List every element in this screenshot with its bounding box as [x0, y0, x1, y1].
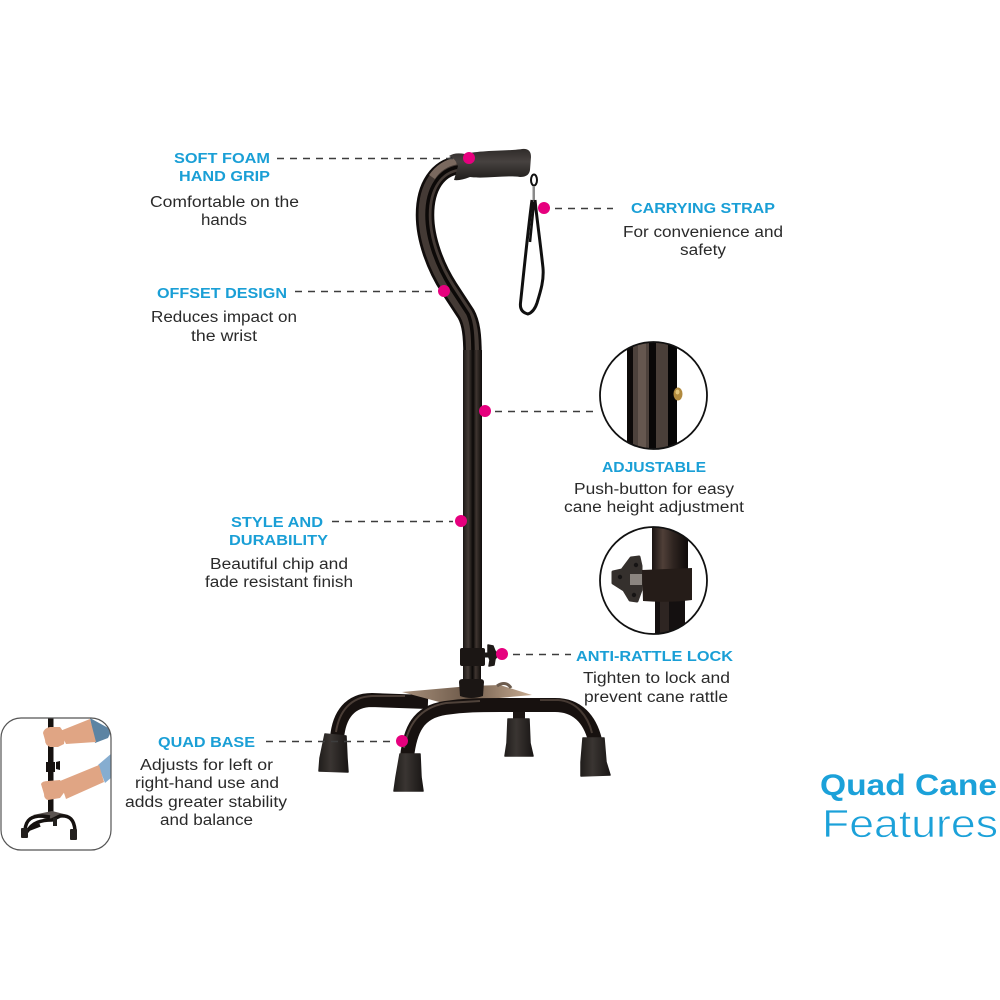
title: Features	[822, 803, 998, 846]
cane: foam hand grip	[449, 149, 531, 180]
description: the wrist	[191, 328, 258, 345]
description: safety	[680, 242, 726, 259]
inset: anti-rattle knob detail	[600, 525, 707, 640]
description	[564, 481, 745, 516]
label: soft foam hand grip	[150, 151, 299, 229]
label: offset design	[151, 286, 297, 345]
label: adjustable	[564, 460, 745, 516]
cane: base plate	[402, 685, 532, 703]
heading: DURABILITY	[229, 533, 328, 549]
label: style and durability	[205, 515, 353, 591]
description: Comfortable on the	[150, 194, 299, 211]
description: Push-button for easy	[574, 481, 734, 498]
cane: curved offset handle	[425, 161, 473, 355]
description: hands	[201, 212, 247, 229]
usage inset: sleeves	[90, 718, 112, 783]
description: Adjusts for left or	[140, 757, 273, 774]
cane: back left leg	[336, 696, 428, 738]
label: carrying strap	[623, 201, 783, 259]
cane: lower shaft	[463, 665, 481, 683]
description: and balance	[160, 812, 253, 829]
description: For convenience and	[623, 224, 783, 241]
heading	[229, 515, 328, 549]
cane: lock knob	[484, 645, 498, 666]
description	[125, 757, 287, 829]
title	[820, 769, 998, 846]
heading: SOFT FOAM	[174, 151, 270, 167]
leader: anti-rattle lock	[496, 648, 571, 660]
product: quad cane	[319, 149, 610, 791]
cane: rubber tip front left	[394, 754, 423, 791]
description: Reduces impact on	[151, 309, 297, 326]
heading: ADJUSTABLE	[602, 460, 706, 476]
leader: carrying strap	[538, 202, 613, 214]
cane: rubber tip front right	[581, 738, 610, 776]
cane: base collar	[459, 679, 484, 698]
title: Quad Cane	[820, 769, 997, 802]
description: fade resistant finish	[205, 574, 353, 591]
description: Tighten to lock and	[583, 670, 730, 687]
cane: front legs	[404, 700, 595, 757]
heading: OFFSET DESIGN	[157, 286, 287, 302]
leader: style and durability	[332, 515, 467, 527]
description	[205, 556, 353, 591]
description: prevent cane rattle	[584, 689, 728, 706]
heading: STYLE AND	[231, 515, 323, 531]
cane: lock collar	[460, 648, 485, 666]
usage inset: hands holding cane	[1, 718, 112, 850]
description	[150, 194, 299, 229]
description	[623, 224, 783, 259]
description: cane height adjustment	[564, 499, 745, 516]
cane: rear plate edge	[497, 684, 511, 688]
heading: QUAD BASE	[158, 735, 255, 751]
heading: ANTI-RATTLE LOCK	[576, 649, 734, 665]
leader: offset design	[295, 285, 450, 297]
cane: straight shaft	[463, 350, 482, 650]
description: adds greater stability	[125, 794, 287, 811]
description: right-hand use and	[135, 775, 279, 792]
label: anti-rattle lock	[576, 649, 734, 706]
usage inset: lower arm and hand	[41, 765, 104, 800]
leader: quad base	[266, 735, 408, 747]
label: quad base	[125, 735, 287, 829]
leader: soft foam hand grip	[277, 152, 475, 164]
description	[583, 670, 730, 706]
heading: HAND GRIP	[179, 169, 270, 185]
heading: CARRYING STRAP	[631, 201, 775, 217]
inset: push-button detail	[600, 340, 707, 452]
heading	[174, 151, 270, 185]
cane: carrying strap	[520, 174, 543, 314]
cane: rubber tip back left	[319, 734, 348, 772]
cane: rubber tip back right	[505, 719, 533, 756]
leader: adjustable	[479, 405, 598, 417]
description: Beautiful chip and	[210, 556, 348, 573]
cane: back right leg	[513, 702, 525, 722]
usage inset: cane	[21, 718, 77, 840]
description	[151, 309, 297, 345]
usage inset: upper arm and hand	[43, 719, 96, 747]
